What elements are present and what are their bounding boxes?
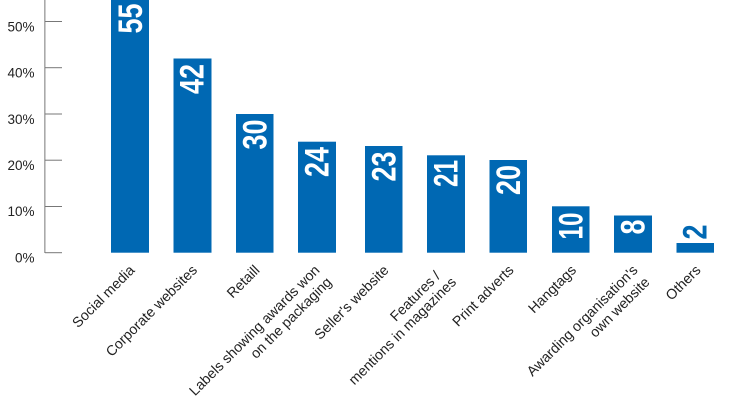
bar: Print adverts 20 xyxy=(490,160,528,253)
bar: Awarding organisation 8: 8 xyxy=(614,220,652,234)
bar: Print adverts 20: 20 xyxy=(490,165,528,195)
y axis labels: 50% xyxy=(7,20,34,34)
category label: Seller's website: Seller's website xyxy=(312,262,392,343)
category label: Features / mentions in magazines: mentions in magazines xyxy=(346,275,460,388)
bar: Others 2 xyxy=(676,224,714,253)
category label: Features / mentions in magazines: Features / xyxy=(387,268,444,325)
category label: Labels showing awards won on the packaging: on the packaging xyxy=(248,275,335,362)
y axis labels: 30% xyxy=(7,112,34,127)
bar: Corporate websites 42 xyxy=(174,58,212,253)
bar: Features 21: 21 xyxy=(428,160,466,187)
bar: Hangtags 10: 10 xyxy=(552,212,590,240)
y axis labels: 10% xyxy=(7,204,34,219)
bar: Corporate websites 42: 42 xyxy=(174,64,212,94)
bar: Features 21 xyxy=(427,155,466,253)
bar: Retail 30 xyxy=(236,114,274,253)
bar: Awarding organisation 8 xyxy=(614,216,652,253)
category label: Hangtags: Hangtags xyxy=(526,263,580,317)
category label: Awarding organisation's own website: own website xyxy=(587,274,653,341)
bar: Seller's website 23 xyxy=(365,146,404,253)
y axis xyxy=(44,0,62,253)
category label: Labels showing awards won on the packaging: Labels showing awards won xyxy=(187,263,323,399)
bar: Others 2: 2 xyxy=(676,225,714,240)
category label: Corporate websites: Corporate websites xyxy=(103,263,201,360)
bar: Hangtags 10 xyxy=(552,206,590,253)
bar: Retail 30: 30 xyxy=(236,120,274,150)
bar: Labels 24 xyxy=(298,142,336,253)
category label: Retail: Retaill xyxy=(224,263,263,302)
bar: Labels 24: 24 xyxy=(298,147,336,177)
bar: Seller's website 23: 23 xyxy=(366,152,404,182)
category label: Others: Others xyxy=(663,263,704,304)
y axis labels: 20% xyxy=(7,158,34,173)
y axis labels: 40% xyxy=(7,66,34,80)
category label: Awarding organisation's own website: Awarding organisation's xyxy=(524,263,641,380)
y axis labels xyxy=(7,20,34,266)
y axis labels: 0% xyxy=(15,250,34,266)
bar: Social media 55 xyxy=(111,0,150,253)
category label: Print adverts: Print adverts xyxy=(450,263,517,330)
category label: Social media: Social media xyxy=(70,262,138,331)
